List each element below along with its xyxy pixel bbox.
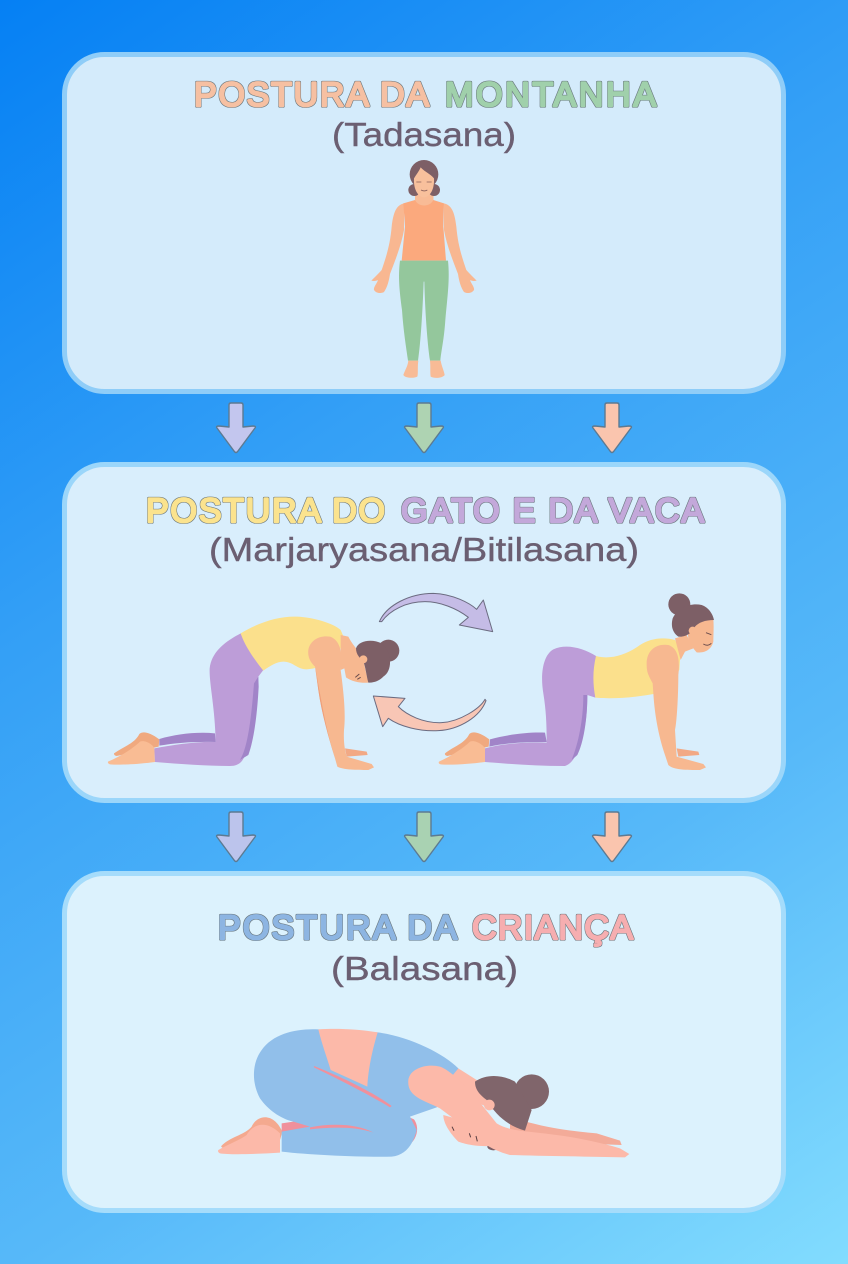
heading: Postura do Gato e da Vaca: POSTURA DO bbox=[146, 492, 385, 530]
arrow: lilac bbox=[217, 403, 255, 452]
heading: Postura da Criança: POSTURA DA bbox=[218, 909, 457, 947]
arrow: peach bbox=[593, 403, 631, 452]
arrow: lilac bbox=[217, 812, 255, 862]
panel: Postura do Gato e da Vaca bbox=[64, 464, 784, 800]
arrow: green bbox=[405, 812, 443, 862]
panel: Postura da Criança bbox=[64, 874, 784, 1210]
arrow: cycle lilac bbox=[379, 593, 493, 632]
panel: Postura da Montanha bbox=[64, 54, 784, 392]
panel card: gato e vaca bbox=[64, 464, 784, 800]
panel card: criança bbox=[64, 874, 784, 1210]
heading: Postura da Montanha: MONTANHA bbox=[445, 76, 656, 114]
heading: Postura do Gato e da Vaca: GATO E DA VACA bbox=[401, 492, 704, 530]
arrows row 2 bbox=[217, 812, 631, 862]
panel card: montanha bbox=[64, 54, 784, 392]
subtitle: Tadasana: (Tadasana) bbox=[332, 116, 516, 153]
arrow: peach bbox=[593, 812, 631, 862]
arrows row 1 bbox=[217, 403, 631, 452]
heading: Postura da Montanha: POSTURA DA bbox=[194, 76, 429, 114]
subtitle: Balasana: (Balasana) bbox=[331, 950, 518, 987]
arrow: cycle pink bbox=[373, 696, 486, 731]
figure: cat pose bbox=[108, 617, 399, 770]
heading: Postura da Criança: CRIANÇA bbox=[472, 909, 633, 947]
subtitle: Marjaryasana/Bitilasana: (Marjaryasana/Bitilasana) bbox=[209, 531, 639, 568]
figure: mountain pose bbox=[371, 160, 477, 378]
arrow: green bbox=[405, 403, 443, 452]
figure: child pose bbox=[218, 1029, 629, 1157]
figure: cow pose bbox=[439, 593, 714, 770]
